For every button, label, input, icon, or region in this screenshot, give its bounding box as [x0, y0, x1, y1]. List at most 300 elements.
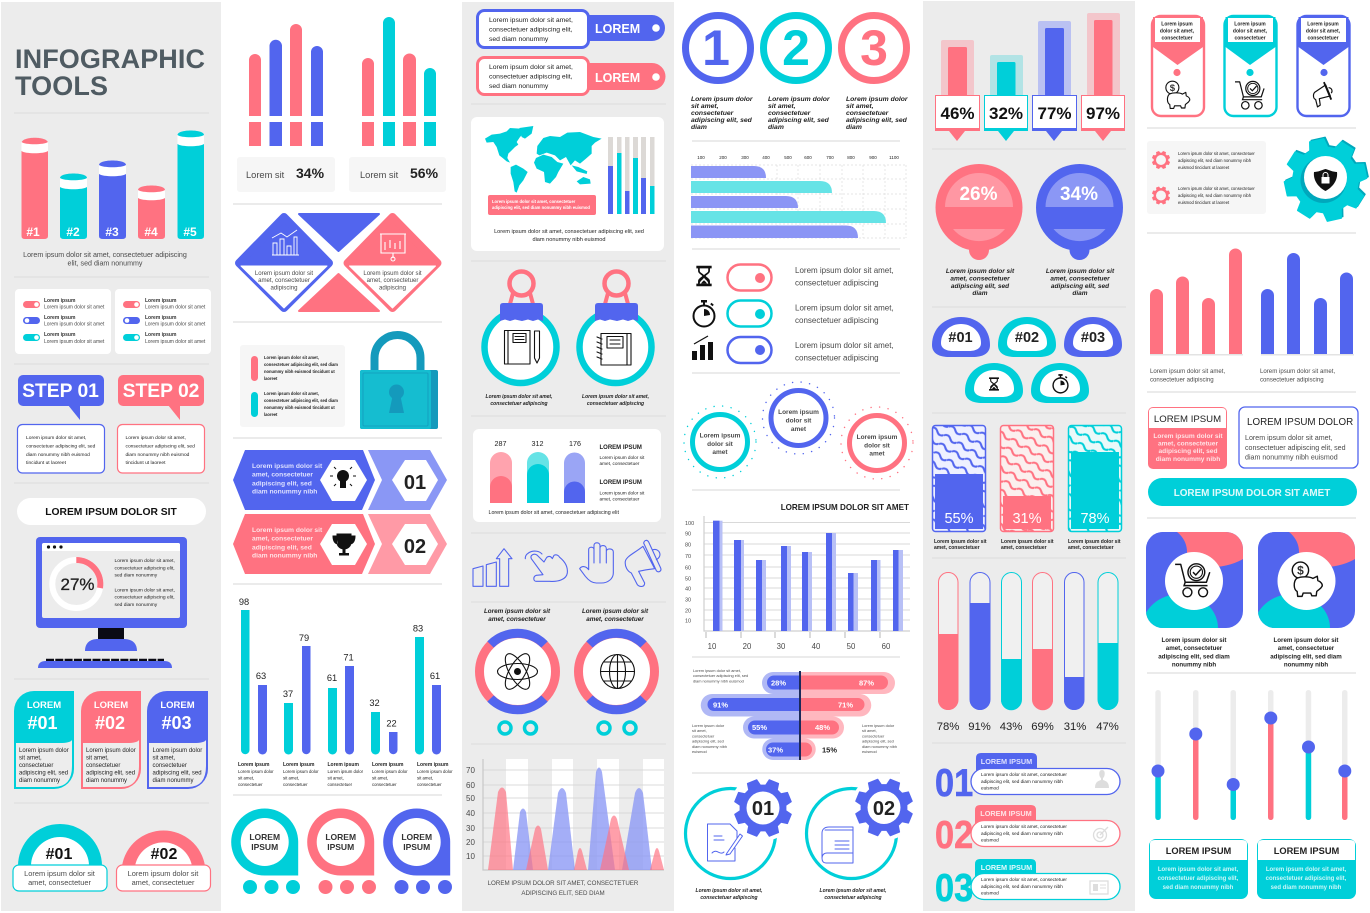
- monitor illustration: Lorem ipsum dolor sit amet,: [114, 587, 175, 593]
- pin coral: IPSUM: [327, 842, 354, 852]
- tag: blue lorem: LOREM: [595, 22, 640, 36]
- gear step 01: [686, 775, 796, 901]
- bar chart: coral and blue 34%: [237, 24, 335, 192]
- card 03: Lorem ipsum dolor: [152, 748, 202, 754]
- balloon 26%: 26%: [959, 184, 998, 205]
- heading pill: LOREM IPSUM DOLOR SIT: [45, 507, 177, 518]
- dotted circle blue: dolor sit: [786, 418, 812, 425]
- monitor illustration: sed diam nonummy: [114, 602, 158, 608]
- card 01: [14, 691, 74, 789]
- dome badges: #02: [1015, 330, 1039, 346]
- toggle row: stopwatch: [694, 300, 894, 326]
- dotted circle coral: Lorem ipsum: [857, 434, 897, 441]
- list row 03: Lorem ipsum dolor sit amet, consectetuer: [981, 877, 1067, 882]
- pin blue: IPSUM: [403, 842, 430, 852]
- butterfly chart: 37%: [768, 746, 783, 754]
- butterfly chart: diam nonummy nibh euismod: [693, 678, 744, 683]
- column chart: 40: [685, 586, 691, 592]
- dotted circle coral: [841, 407, 913, 479]
- donut: atom: [480, 633, 556, 734]
- numbered circle 1: sit amet,: [691, 103, 719, 110]
- list row 03: LOREM IPSUM: [981, 863, 1032, 872]
- panel: toggle list left: Lorem ipsum: [44, 332, 76, 338]
- monitor illustration: consectetuer adipiscing elit,: [114, 565, 175, 571]
- pointer bars: [935, 13, 1125, 141]
- tag card: cart: dolor sit amet,: [1233, 28, 1268, 34]
- pointer bars: 97%: [1086, 104, 1120, 123]
- tag card: cart: [1224, 16, 1276, 116]
- panel: gauge bars: Lorem ipsum dolor sit: [600, 455, 644, 460]
- panel: gear notes: euismod tincidunt ut laoreet: [1178, 165, 1230, 170]
- toggle row: growth chart: Lorem ipsum dolor sit amet,: [795, 341, 894, 350]
- balloon 34%: [1036, 164, 1123, 297]
- hexagon row 01: amet, consectetuer: [252, 472, 313, 479]
- banner pill: [1148, 478, 1357, 506]
- panel: lock notes: laoreet: [264, 412, 278, 417]
- donut captions: Lorem ipsum dolor sit: [582, 608, 649, 615]
- icon tile: piggy bank: adipiscing elit, sed diam: [1270, 653, 1342, 660]
- box: coral info: Lorem ipsum dolor sit: [1153, 433, 1223, 440]
- icon tile: cart: nonummy nibh: [1172, 662, 1216, 669]
- tag: blue lorem: [478, 10, 665, 48]
- area chart: 40: [466, 809, 475, 818]
- card 01: Lorem ipsum dolor: [19, 748, 69, 754]
- numbered circle 3: sit amet,: [846, 103, 874, 110]
- wave gauge 55%: amet, consectetuer: [934, 545, 980, 551]
- diamond diagram: amet, consectetuer: [367, 277, 418, 284]
- donut captions: Lorem ipsum dolor sit: [484, 608, 550, 615]
- panel: lock notes: [240, 345, 345, 427]
- diamond diagram: amet, consectetuer: [258, 277, 310, 284]
- tube gauges: [937, 572, 1119, 733]
- panel: lock notes: nonummy nibh euismod tincidunt ut: [264, 369, 335, 374]
- panel: world map: diam nonummy nibh euismod: [532, 237, 606, 243]
- butterfly chart: adipiscing elit, sed: [692, 739, 724, 744]
- diamond diagram: adipiscing: [270, 284, 298, 291]
- bar chart: coral: consectetuer adipiscing: [1150, 376, 1214, 383]
- wave gauge 78%: Lorem ipsum dolor sit: [1068, 539, 1121, 545]
- panel: world map: [471, 117, 664, 251]
- grouped bar chart: sit amet,: [328, 776, 344, 780]
- dome badges: #03: [1081, 330, 1105, 346]
- bar chart: coral and blue 34%: Lorem sit: [246, 170, 285, 180]
- cylinder bar chart: [22, 130, 204, 239]
- icon tile: cart: Lorem ipsum dolor sit: [1162, 637, 1226, 644]
- hexagon row 02: diam nonummy nibh: [252, 553, 317, 560]
- bar chart: coral and teal 56%: [349, 17, 446, 192]
- bar chart: coral: [1150, 248, 1243, 383]
- dotted circle teal: dolor sit: [707, 441, 734, 448]
- wave gauge 78%: [1068, 426, 1122, 551]
- gear step 01: Lorem ipsum dolor sit amet,: [696, 888, 762, 894]
- hexagon row 01: 01: [404, 472, 426, 494]
- clip captions: Lorem ipsum dolor sit amet,: [582, 394, 649, 400]
- list row 02: 02: [935, 813, 973, 856]
- area chart: LOREM IPSUM DOLOR SIT AMET, CONSECTETUER: [488, 880, 638, 887]
- panel: gear notes: [1147, 141, 1266, 214]
- panel: lock notes: consectetuer adipiscing elit, sed diam: [264, 398, 338, 403]
- box: teal info left: Lorem ipsum dolor sit amet,: [1158, 867, 1238, 873]
- grouped bar chart: sit amet,: [238, 776, 254, 780]
- grouped bar chart: sit amet,: [283, 776, 299, 780]
- column chart: 90: [685, 532, 691, 538]
- card 03: consectetuer: [152, 763, 187, 769]
- badge #01: Lorem ipsum dolor sit: [24, 869, 95, 878]
- box: blue info: [1239, 407, 1358, 468]
- badge #01: amet, consectetuer: [28, 878, 91, 887]
- tube gauges: 47%: [1096, 721, 1119, 733]
- panel: toggle list left: Lorem ipsum dolor sit amet: [44, 339, 105, 345]
- wave gauge 78%: amet, consectetuer: [1068, 545, 1114, 551]
- numbered circle 1: 1: [702, 20, 730, 76]
- grouped bar chart: 61: [327, 673, 337, 683]
- list row 03: euismod: [981, 891, 999, 896]
- tube gauges: 91%: [968, 721, 991, 733]
- badge #02: Lorem ipsum dolor sit: [128, 869, 198, 878]
- horizontal bar chart: [691, 155, 906, 238]
- panel: toggle list left: Lorem ipsum dolor sit amet: [44, 304, 105, 310]
- icon tile: piggy bank: Lorem ipsum dolor sit: [1274, 637, 1338, 644]
- butterfly chart: diam nonummy nibh: [692, 744, 727, 749]
- tag card: cart: Lorem ipsum: [1234, 22, 1266, 28]
- panel: gear notes: Lorem ipsum dolor sit amet, consectetuer: [1178, 151, 1255, 156]
- panel: toggle list right: Lorem ipsum: [145, 332, 177, 338]
- balloon 34%: amet, consectetuer: [1050, 275, 1110, 282]
- numbered circle 3: adipiscing elit, sed: [846, 117, 908, 124]
- slider group: [1152, 690, 1351, 820]
- box: teal info right: sed diam nonummy nibh: [1271, 885, 1342, 891]
- column chart: 40: [812, 642, 821, 651]
- butterfly chart: diam nonummy nibh: [862, 744, 897, 749]
- panel: lock notes: consectetuer adipiscing elit, sed diam: [264, 362, 338, 367]
- title: TOOLS: [15, 71, 108, 101]
- card 02: adipiscing elit, sed: [86, 770, 135, 776]
- horizontal bar chart: 1100: [889, 155, 899, 160]
- pin blue: [383, 808, 452, 894]
- butterfly chart: adipiscing elit, sed: [862, 739, 894, 744]
- monitor illustration: Lorem ipsum dolor sit amet,: [114, 559, 175, 564]
- cylinder bar chart: #1: [26, 225, 40, 239]
- panel: lock notes: laoreet: [264, 376, 278, 381]
- donut: globe: [578, 633, 654, 734]
- column chart: 20: [685, 608, 691, 614]
- hexagon row 01: diam nonummy nibh: [252, 489, 317, 496]
- gear step 02: [806, 774, 917, 901]
- callout: step 01: consectetuer adipiscing elit, sed: [26, 444, 96, 450]
- clip captions: consectetuer adipiscing: [587, 401, 644, 407]
- dotted circle blue: Lorem ipsum: [778, 409, 819, 416]
- wave gauge 31%: Lorem ipsum dolor sit: [1001, 539, 1054, 545]
- tube gauges: 78%: [937, 721, 959, 733]
- grouped bar chart: Lorem ipsum dolor: [283, 769, 319, 774]
- box: coral info: adipiscing elit, sed: [1158, 448, 1218, 455]
- panel: toggle list right: Lorem ipsum: [145, 298, 177, 304]
- grouped bar chart: Lorem ipsum: [328, 762, 359, 768]
- box: teal info right: LOREM IPSUM: [1274, 846, 1340, 856]
- gear step 02: 02: [873, 798, 895, 820]
- panel: toggle list left: Lorem ipsum: [44, 315, 76, 321]
- panel: third gray column: [462, 2, 674, 911]
- box: coral info: [1148, 407, 1227, 469]
- toggle row: growth chart: [692, 336, 894, 363]
- numbered circle 1: [686, 16, 753, 131]
- grouped bar chart: 32: [369, 698, 380, 708]
- card 02: LOREM: [94, 700, 128, 711]
- panel: gear notes: euismod tincidunt ut laoreet: [1178, 200, 1230, 205]
- pointer bars: 77%: [1037, 104, 1072, 123]
- box: blue info: LOREM IPSUM DOLOR: [1247, 417, 1353, 428]
- card 01: consectetuer: [19, 763, 53, 769]
- bar chart: coral: Lorem ipsum dolor sit amet,: [1150, 368, 1225, 375]
- icon tile: piggy bank: [1258, 532, 1355, 668]
- icon row: outline actions: [473, 540, 661, 586]
- card 01: #01: [27, 713, 58, 733]
- numbered circle 2: 2: [782, 20, 810, 76]
- butterfly chart: consectetuer adipiscing elit, sed: [693, 673, 748, 678]
- butterfly chart: [692, 668, 897, 760]
- panel: toggle list right: Lorem ipsum dolor sit amet: [145, 322, 206, 328]
- panel: gauge bars: LOREM IPSUM: [600, 480, 642, 486]
- card 02: diam nonummy: [86, 778, 127, 784]
- butterfly chart: Lorem ipsum dolor sit amet,: [693, 668, 741, 673]
- tag card: megaphone: consectetuer: [1307, 36, 1339, 42]
- butterfly chart: Lorem ipsum dolor: [692, 723, 724, 728]
- area chart: 50: [466, 794, 475, 803]
- tube gauges: 43%: [1000, 721, 1022, 733]
- tag: coral lorem: sed diam nonummy: [489, 83, 549, 90]
- toggle row: stopwatch: consectetuer adipiscing: [795, 316, 879, 325]
- chart heading: LOREM IPSUM DOLOR SIT AMET: [781, 503, 909, 512]
- chart caption: Lorem ipsum dolor sit amet, consectetuer adipiscing: [23, 251, 187, 259]
- panel: gear notes: adipiscing elit, sed diam nonummy nibh: [1178, 193, 1252, 198]
- grouped bar chart: consectetuer: [372, 782, 397, 787]
- box: blue info: diam nonummy nibh euismod: [1245, 454, 1338, 462]
- toggle row: hourglass: [696, 264, 894, 290]
- card 02: #02: [95, 713, 125, 733]
- tag card: piggy bank: Lorem ipsum: [1161, 22, 1193, 28]
- map: [485, 126, 602, 193]
- gear step 02: consectetuer adipiscing: [824, 895, 882, 901]
- butterfly chart: sit amet,: [692, 728, 707, 733]
- panel: world map: adipiscing elit, sed diam nonummy nibh euismod: [492, 205, 590, 210]
- panel: left gray column: [1, 2, 221, 911]
- dotted circle teal: Lorem ipsum: [700, 432, 740, 440]
- badge #01: [13, 824, 107, 891]
- pointer bars: 46%: [940, 104, 975, 123]
- column chart: 80: [685, 542, 691, 548]
- tag card: megaphone: [1298, 16, 1350, 116]
- horizontal bar chart: 100: [697, 155, 705, 160]
- cylinder bar chart: #3: [105, 225, 119, 239]
- tag: coral lorem: LOREM: [595, 71, 640, 85]
- box: teal info left: [1149, 839, 1248, 899]
- panel: toggle list left: [15, 289, 111, 354]
- butterfly chart: 28%: [771, 678, 786, 688]
- area chart: 10: [466, 852, 475, 861]
- panel: gauge bars: 176: [569, 439, 581, 448]
- grouped bar chart: Lorem ipsum: [283, 762, 315, 768]
- tag card: piggy bank: dolor sit amet,: [1160, 28, 1195, 34]
- callout: step 02: Lorem ipsum dolor sit amet,: [126, 436, 186, 441]
- tag card: megaphone: dolor sit amet,: [1306, 28, 1341, 34]
- balloon 26%: amet, consectetuer: [950, 275, 1010, 282]
- hexagon row 01: adipiscing elit, sed: [252, 480, 312, 487]
- box: teal info left: LOREM IPSUM: [1166, 846, 1232, 856]
- butterfly chart: 71%: [838, 700, 853, 710]
- toggle row: hourglass: consectetuer adipiscing: [795, 278, 879, 287]
- tag: coral lorem: Lorem ipsum dolor sit amet,: [489, 64, 573, 71]
- monitor illustration: 27%: [60, 575, 95, 594]
- butterfly chart: 15%: [822, 746, 837, 754]
- banner pill: LOREM IPSUM DOLOR SIT AMET: [1174, 488, 1330, 499]
- numbered circle 2: adipiscing elit, sed: [768, 117, 830, 124]
- callout: step 01: STEP 01: [22, 381, 99, 402]
- title: [15, 44, 205, 101]
- panel: lock notes: nonummy nibh euismod tincidunt ut: [264, 405, 335, 410]
- title: INFOGRAPHIC: [15, 44, 205, 74]
- dotted circle blue: [762, 382, 834, 454]
- grouped bar chart: [238, 597, 453, 787]
- pin coral: LOREM: [325, 832, 356, 842]
- tag: coral lorem: [478, 58, 666, 94]
- grouped bar chart: 98: [239, 597, 249, 607]
- horizontal bar chart: 800: [847, 155, 855, 160]
- card 01: adipiscing elit, sed: [19, 770, 68, 776]
- grouped bar chart: Lorem ipsum dolor: [417, 769, 453, 774]
- butterfly chart: Lorem ipsum dolor: [862, 723, 894, 728]
- butterfly chart: sit amet,: [862, 728, 877, 733]
- numbered circle 1: diam: [691, 124, 707, 131]
- panel: gauge bars: Lorem ipsum dolor sit amet, consectetuer adipiscing elit: [488, 510, 619, 516]
- card 02: Lorem ipsum dolor: [86, 748, 136, 754]
- box: teal info right: Lorem ipsum dolor sit amet,: [1266, 867, 1346, 873]
- list row 03: adipiscing elit, sed diam nonummy nibh: [981, 884, 1063, 889]
- dotted circle coral: dolor sit: [864, 442, 891, 449]
- balloon 34%: diam: [1072, 290, 1088, 297]
- butterfly chart: euismod: [862, 749, 877, 754]
- box: blue info: consectetuer adipiscing elit, sed: [1245, 444, 1346, 452]
- grouped bar chart: 61: [430, 671, 440, 681]
- column chart: [685, 516, 910, 651]
- wave gauge 55%: 55%: [944, 511, 974, 527]
- badge #02: [116, 830, 210, 891]
- numbered circle 2: sit amet,: [768, 103, 796, 110]
- pin teal: IPSUM: [251, 842, 278, 852]
- box: coral info: LOREM IPSUM: [1154, 414, 1221, 425]
- numbered circle 3: [842, 16, 908, 131]
- bar chart: coral and blue 34%: 34%: [296, 165, 325, 181]
- callout: step 02: consectetuer adipiscing elit, sed: [126, 444, 195, 450]
- area chart: 20: [466, 838, 475, 847]
- box: teal info right: [1257, 839, 1356, 899]
- horizontal bar chart: 400: [762, 155, 770, 160]
- tag card: megaphone: Lorem ipsum: [1307, 22, 1339, 28]
- clip icon: notebook: [484, 272, 556, 383]
- icon: padlock: [360, 335, 438, 429]
- callout: step 01: Lorem ipsum dolor sit amet,: [26, 436, 86, 441]
- hexagon row 02: amet, consectetuer: [252, 536, 313, 543]
- callout: step 01: diam nonummy nibh euismod: [26, 452, 90, 458]
- card 03: [147, 691, 208, 789]
- panel: gauge bars: Lorem ipsum dolor sit: [600, 490, 644, 496]
- cylinder bar chart: #4: [144, 225, 158, 239]
- panel: toggle list left: Lorem ipsum dolor sit amet: [44, 322, 105, 328]
- panel: toggle list left: Lorem ipsum: [44, 298, 76, 304]
- clip captions: consectetuer adipiscing: [490, 401, 548, 407]
- list row 01: Lorem ipsum dolor sit amet, consectetuer: [981, 772, 1067, 777]
- column chart: 30: [685, 598, 691, 604]
- icon tile: cart: amet, consectetuer: [1166, 645, 1223, 652]
- monitor illustration: sed diam nonummy: [114, 573, 158, 579]
- tag: blue lorem: sed diam nonummy: [489, 36, 549, 43]
- grouped bar chart: Lorem ipsum: [417, 762, 449, 768]
- card 03: adipiscing elit, sed: [152, 770, 202, 776]
- toggle row: hourglass: Lorem ipsum dolor sit amet,: [795, 266, 894, 275]
- numbered circle 1: Lorem ipsum dolor: [691, 96, 753, 103]
- grouped bar chart: 71: [343, 652, 354, 662]
- area chart: 30: [466, 824, 475, 833]
- column chart: 100: [685, 521, 694, 527]
- list row 01: LOREM IPSUM: [981, 757, 1032, 766]
- butterfly chart: consectetuer: [862, 733, 885, 738]
- horizontal bar chart: 500: [784, 155, 792, 160]
- numbered circle 3: consectetuer: [846, 110, 889, 117]
- list row 02: Lorem ipsum dolor sit amet, consectetuer: [981, 824, 1067, 829]
- monitor illustration: consectetuer adipiscing elit,: [114, 595, 175, 601]
- grouped bar chart: 83: [413, 624, 423, 634]
- grouped bar chart: consectetuer: [328, 782, 353, 787]
- card 03: diam nonummy: [152, 778, 194, 784]
- grouped bar chart: consectetuer: [417, 782, 442, 787]
- box: teal info left: sed diam nonummy nibh: [1163, 885, 1234, 891]
- column chart: 60: [882, 642, 891, 651]
- pin teal: LOREM: [249, 832, 280, 842]
- hexagon row 01: Lorem ipsum dolor sit: [252, 463, 322, 470]
- gear step 01: 01: [752, 798, 774, 820]
- icon tile: piggy bank: nonummy nibh: [1284, 662, 1328, 669]
- grouped bar chart: consectetuer: [283, 782, 308, 787]
- donut captions: amet, consectetuer: [586, 616, 644, 623]
- callout: step 02: diam nonummy nibh euismod: [126, 452, 190, 458]
- hexagon row 01: [233, 450, 447, 510]
- butterfly chart: consectetuer: [692, 733, 715, 738]
- list row 01: [935, 753, 1120, 804]
- grouped bar chart: Lorem ipsum: [238, 762, 270, 768]
- numbered circle 2: [764, 16, 830, 131]
- cylinder bar chart: #5: [183, 225, 197, 239]
- hexagon row 02: adipiscing elit, sed: [252, 544, 312, 551]
- bar chart: coral and teal 56%: Lorem sit: [360, 170, 399, 180]
- area chart: ADIPISCING ELIT, SED DIAM: [521, 890, 605, 897]
- column chart: 30: [777, 642, 786, 651]
- panel: toggle list right: Lorem ipsum dolor sit amet: [145, 304, 206, 310]
- list row 01: adipiscing elit, sed diam nonummy nibh: [981, 779, 1063, 784]
- grouped bar chart: Lorem ipsum dolor: [238, 769, 274, 774]
- pin coral: [307, 808, 376, 894]
- tag card: cart: consectetuer: [1234, 36, 1266, 42]
- balloon 34%: Lorem ipsum dolor sit: [1046, 268, 1114, 275]
- toggle row: stopwatch: Lorem ipsum dolor sit amet,: [795, 304, 894, 312]
- horizontal bar chart: 900: [869, 155, 877, 160]
- panel: toggle list right: Lorem ipsum: [145, 315, 177, 321]
- callout: step 02: STEP 02: [123, 381, 199, 402]
- tag: blue lorem: Lorem ipsum dolor sit amet,: [489, 17, 573, 24]
- gear step 01: consectetuer adipiscing: [700, 895, 758, 901]
- card 03: sit amet,: [152, 756, 176, 762]
- butterfly chart: euismod: [692, 749, 707, 754]
- clip captions: Lorem ipsum dolor sit amet,: [486, 394, 552, 400]
- tube gauges: 69%: [1031, 721, 1054, 733]
